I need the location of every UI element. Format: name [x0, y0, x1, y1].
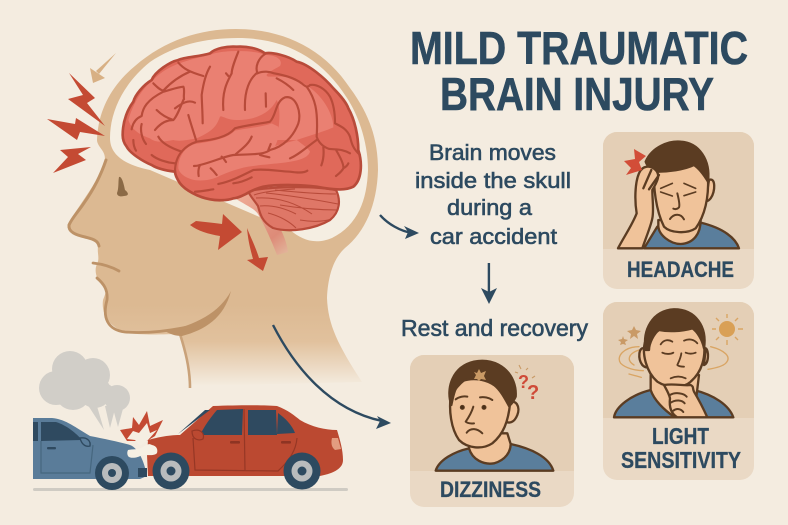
red car front wheel: [152, 452, 190, 490]
light temporal area: [178, 123, 310, 180]
panel: headache: [603, 132, 754, 289]
pain spark: [624, 149, 646, 175]
red movement arrow right: [190, 214, 242, 250]
person holding head: [618, 142, 739, 248]
label: DIZZINESS: [440, 477, 541, 502]
bolt bottom: [53, 147, 91, 173]
star on head: [474, 369, 486, 381]
red car: [147, 405, 343, 490]
brainstem: [233, 192, 288, 255]
red question marks: [515, 365, 539, 404]
sun: [712, 314, 743, 345]
ground shadow: [33, 488, 348, 491]
skull gap inside head: [110, 38, 368, 241]
illustration: car crash: [33, 351, 348, 491]
panel: dizziness: [410, 355, 574, 507]
mouth and chin line: [93, 263, 188, 333]
text: brain moves inside the skull: Brain moves: [429, 140, 556, 165]
cerebellum: [248, 187, 339, 230]
person with dizziness: [436, 361, 553, 471]
impact lightning bolts: [47, 73, 105, 173]
panel: light sensitivity: SENSITIVITY: [621, 447, 741, 473]
tan arrow pointing to forehead: [90, 53, 116, 83]
down arrow: [481, 263, 497, 304]
text: brain moves inside the skull: car accident: [430, 224, 557, 249]
blue car: [33, 418, 147, 490]
neck line: [180, 334, 190, 388]
sulci: [132, 52, 360, 192]
blue car wheel: [95, 456, 129, 490]
outline: [123, 47, 361, 200]
swirls: [619, 347, 728, 377]
illustration: head profile with brain: [69, 29, 378, 388]
cerebrum: [123, 47, 361, 200]
panel: light sensitivity: [603, 302, 754, 480]
text: brain moves inside the skull: inside the skull: [415, 168, 571, 193]
text: brain moves inside the skull: during a: [447, 195, 533, 220]
text: rest and recovery: Rest and recovery: [401, 315, 588, 341]
label: HEADACHE: [627, 257, 734, 282]
title: BRAIN INJURY: [440, 68, 714, 120]
curved arrow to dizziness: [273, 325, 391, 429]
stars: [618, 326, 641, 345]
forehead and face line: [69, 160, 106, 246]
red movement arrow down: [247, 228, 268, 271]
light frontal area: [128, 51, 333, 142]
label: LIGHT: [652, 423, 709, 449]
nostril: [117, 177, 128, 196]
crash spark: [120, 411, 163, 458]
red car rear wheel: [284, 452, 320, 490]
bolt top: [68, 73, 105, 126]
title: [410, 22, 748, 120]
head silhouette: [69, 29, 378, 386]
red question marks: ?: [527, 382, 539, 404]
headlight flash: [127, 444, 157, 458]
text: brain moves inside the skull: [415, 140, 571, 249]
bolt middle: [47, 118, 105, 140]
arrow from brain to text: [380, 215, 419, 239]
smoke cloud: [39, 351, 130, 430]
jaw shadow: [165, 291, 231, 336]
person with hand on chin: [614, 309, 733, 417]
red question marks: ?: [518, 372, 529, 392]
